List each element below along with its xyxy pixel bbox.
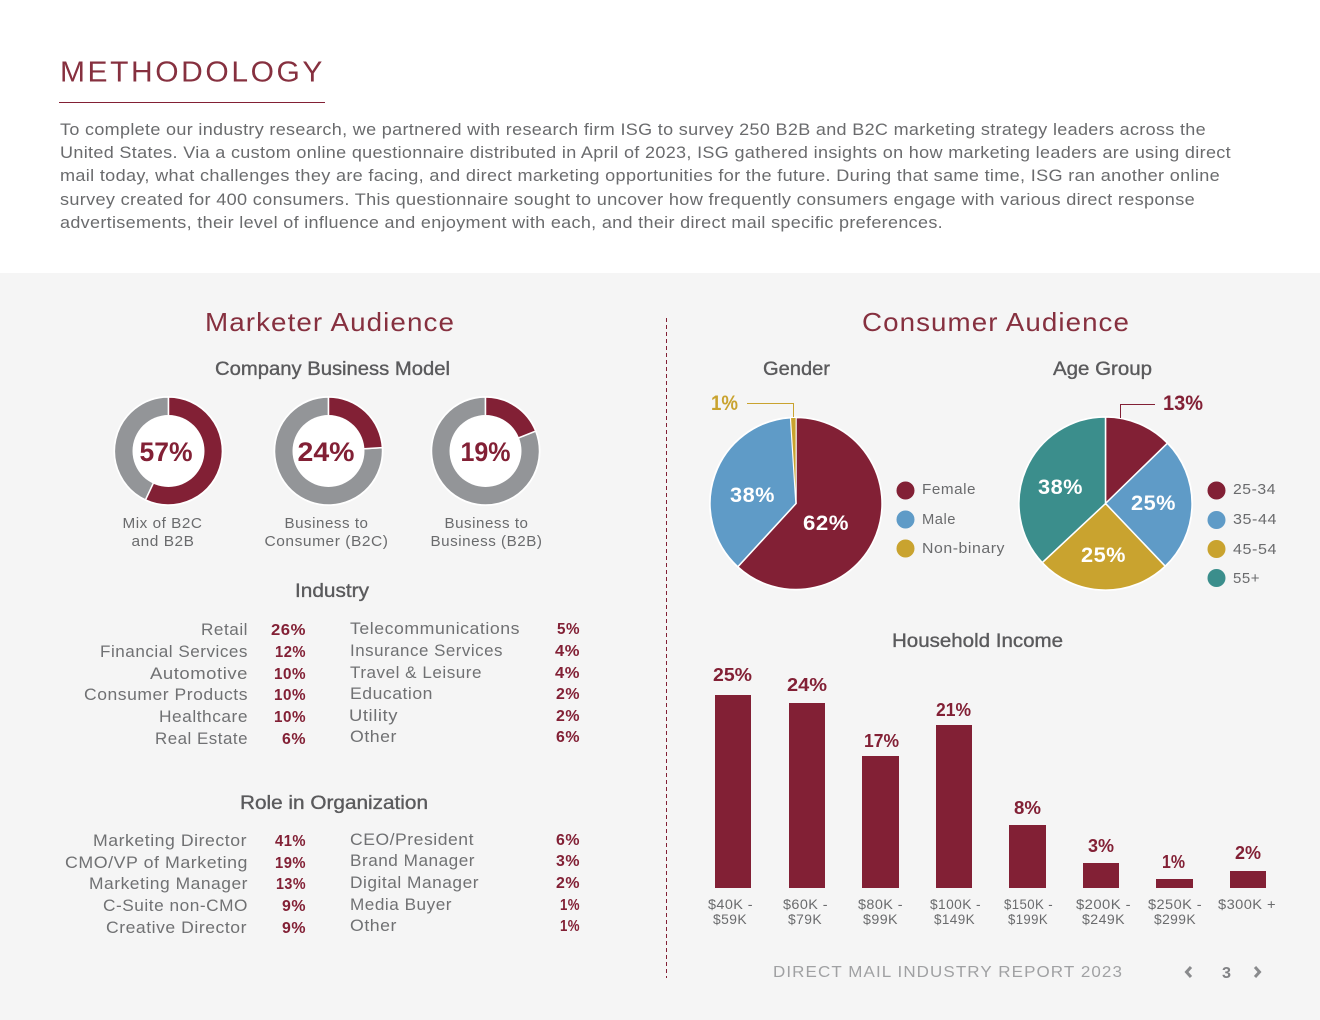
table: role right column: 1% [560,897,580,914]
bar chart: household income: $199K [1008,912,1048,927]
bar chart: household income [708,631,1276,927]
bar chart: household income: $60K - [783,897,828,912]
methodology text block: survey created for 400 consumers. This questionnaire sought to uncover how frequently consumers engage with various direct response [60,191,1195,209]
table: industry right column: Education [350,685,433,703]
table: role left column: 19% [275,855,306,872]
table: industry left column: Automotive [150,665,248,683]
table: industry right column: Telecommunications [350,620,520,638]
methodology text block: To complete our industry research, we partnered with research firm ISG to survey 250 B2B and B2C marketing strategy leaders across the [60,121,1206,139]
bar chart: household income: $40K - [708,897,753,912]
pie chart: gender: Gender [763,359,831,380]
donut: business to consumer: 24% [298,437,354,467]
bar chart: household income: $100K - [930,897,981,912]
bar chart: household income: $149K [934,912,975,927]
donut: business to business: 19% [460,437,510,467]
bar chart: household income: 3% [1088,835,1114,856]
table: role right column: 1% [560,918,580,935]
table: industry right column: 2% [556,708,580,725]
table: role right column: 2% [556,875,580,892]
pie chart: age group: 25% [1081,543,1126,567]
methodology text block: mail today, what challenges they are facing, and direct marketing opportunities for the future. During that same time, ISG ran another online [60,167,1220,185]
footer: report name: DIRECT MAIL INDUSTRY REPORT 2023 [773,964,1123,981]
heading: marketer audience: Marketer Audience [205,307,455,337]
table: industry right column: Other [350,728,397,746]
pie chart: age group: Age Group [1053,359,1152,380]
table: role right column [350,831,580,935]
methodology text block [60,121,1231,232]
heading: company business model: Company Business Model [215,359,450,380]
table: industry right column: 6% [556,729,580,746]
bar chart: household income: 1% [1162,851,1185,872]
table: industry right column: 4% [555,665,580,682]
methodology text block: advertisements, their level of influence and enjoyment with each, and their direct mail specific preferences. [60,214,943,232]
donut: business to business: Business to [444,516,528,532]
donut: business to business [430,396,542,550]
table: role right column: 6% [556,832,580,849]
pie chart: gender [709,359,883,590]
pie chart: gender: 62% [803,511,849,535]
pie chart: gender: 38% [730,483,775,507]
table: role left column: 9% [282,920,306,937]
table: industry left column: 6% [282,731,306,748]
bar chart: household income: 17% [864,730,899,751]
donut: mix of B2C and B2B: and B2B [132,534,194,550]
legend: gender: Male [922,512,956,528]
bar chart: household income: $150K - [1004,897,1053,912]
methodology text block: United States. Via a custom online questionnaire distributed in April of 2023, ISG gathered insights on how marketing leaders are using direct [60,144,1231,162]
table: industry left column: 26% [271,622,306,639]
table: industry right column: Utility [349,707,398,725]
legend: age group: 55+ [1233,571,1260,587]
donut: mix of B2C and B2B [114,396,224,550]
table: role right column: Digital Manager [350,874,479,892]
table: industry right column: Travel & Leisure [350,664,482,682]
table: role left column: C-Suite non-CMO [103,897,248,915]
heading: industry: Industry [295,581,370,602]
heading: consumer audience: Consumer Audience [862,307,1130,337]
table: role right column: Brand Manager [350,852,475,870]
table: role right column: Media Buyer [350,896,452,914]
table: role left column: Marketing Director [93,832,247,850]
bar chart: household income: $79K [788,912,822,927]
table: role left column: Creative Director [106,919,247,937]
bar chart: household income: 25% [713,664,752,685]
donut: business to consumer: Business to [284,516,368,532]
table: industry right column: 4% [555,643,580,660]
table: role left column [65,832,306,937]
pie chart: age group [1018,359,1203,591]
table: industry left column: Real Estate [155,730,248,748]
bar chart: household income: $300K + [1218,897,1276,912]
table: role right column: 3% [556,853,580,870]
heading: role in organization: Role in Organization [240,793,428,814]
bar chart: household income: Household Income [892,631,1063,652]
bar chart: household income: $80K - [858,897,903,912]
donut: business to consumer: Consumer (B2C) [264,534,388,550]
table: industry right column: 2% [556,686,580,703]
table: industry left column: Healthcare [159,708,248,726]
legend: gender: Female [922,482,976,498]
table: role left column: Marketing Manager [89,875,248,893]
table: role left column: 9% [282,898,306,915]
legend: age group: 45-54 [1233,542,1277,558]
donut: business to business: Business (B2B) [430,534,542,550]
bar chart: household income: 21% [936,699,971,720]
bar chart: household income: $299K [1154,912,1196,927]
footer: page navigation [1186,965,1260,982]
table: industry left column [84,621,306,748]
table: industry left column: Consumer Products [84,686,248,704]
table: industry right column: 5% [557,621,580,638]
table: industry left column: 10% [274,687,306,704]
footer: page navigation: 3 [1222,965,1231,982]
table: role left column: 41% [275,833,306,850]
legend: age group [1208,482,1277,587]
legend: gender [896,482,1005,558]
table: role right column: Other [350,917,397,935]
table: industry left column: Financial Services [100,643,248,661]
bar chart: household income: 8% [1014,797,1041,818]
pie chart: age group: 25% [1131,491,1176,515]
table: role left column: 13% [276,876,306,893]
legend: age group: 35-44 [1233,512,1277,528]
panel: consumer audience [708,307,1277,927]
table: industry right column [349,620,580,746]
bar chart: household income: $249K [1082,912,1125,927]
bar chart: household income: 2% [1235,842,1261,863]
bar chart: household income: $59K [713,912,747,927]
bar chart: household income: $200K - [1076,897,1131,912]
donut: mix of B2C and B2B: Mix of B2C [122,516,202,532]
legend: age group: 25-34 [1233,482,1276,498]
table: industry left column: 10% [274,709,306,726]
table: industry right column: Insurance Services [350,642,503,660]
pie chart: gender: 1% [711,392,738,415]
title: METHODOLOGY [60,56,325,88]
bar chart: household income: $99K [863,912,898,927]
legend: gender: Non-binary [922,541,1005,557]
pie chart: age group: 38% [1038,475,1083,499]
donut: mix of B2C and B2B: 57% [140,437,192,467]
panel: marketer audience [65,307,580,937]
bar chart: household income: 24% [787,674,827,695]
table: industry left column: Retail [201,621,248,639]
table: industry left column: 10% [274,666,306,683]
table: role left column: CMO/VP of Marketing [65,854,248,872]
table: industry left column: 12% [275,644,306,661]
bar chart: household income: $250K - [1148,897,1202,912]
table: role right column: CEO/President [350,831,474,849]
donut: business to consumer [264,396,388,550]
pie chart: age group: 13% [1163,392,1203,415]
